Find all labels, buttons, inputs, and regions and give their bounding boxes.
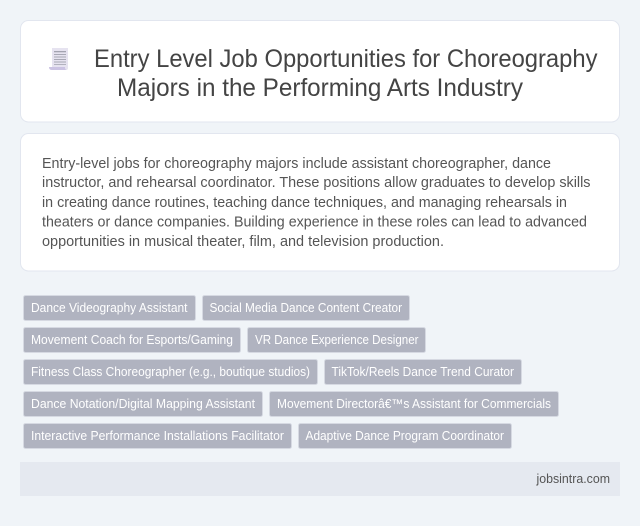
- description text: instructor, and rehearsal coordinator. These positions allow graduates to develop skills: [42, 174, 590, 191]
- panel: job tags: [24, 296, 558, 448]
- panel: title card: [20, 20, 620, 122]
- tag: VR Dance Experience Designer: [255, 333, 418, 347]
- tag: [248, 328, 426, 352]
- tag: [324, 360, 522, 384]
- title: Majors in the Performing Arts Industry: [117, 74, 523, 102]
- tag: Dance Videography Assistant: [31, 301, 188, 315]
- description text: theaters or dance companies. Building experience in these roles can lead to advanced: [42, 214, 587, 230]
- tag: [24, 328, 240, 352]
- tag: [24, 424, 292, 448]
- tag: TikTok/Reels Dance Trend Curator: [332, 365, 514, 379]
- tag: [202, 296, 410, 320]
- tag: Social Media Dance Content Creator: [210, 301, 402, 315]
- description text: [42, 155, 590, 250]
- tag: Dance Notation/Digital Mapping Assistant: [31, 397, 256, 411]
- title: [94, 45, 598, 102]
- description text: Entry-level jobs for choreography majors include assistant choreographer, dance: [42, 155, 551, 172]
- tag: Adaptive Dance Program Coordinator: [306, 429, 504, 443]
- icon: scroll document: [49, 48, 68, 70]
- tag: Movement Coach for Esports/Gaming: [31, 333, 233, 347]
- tag: Fitness Class Choreographer (e.g., boutique studios): [31, 365, 310, 379]
- tag: [24, 296, 196, 320]
- panel: footer: [20, 462, 620, 496]
- title: Entry Level Job Opportunities for Choreography: [94, 45, 598, 73]
- tag: [24, 392, 262, 416]
- tag: [24, 360, 318, 384]
- tag: [270, 392, 558, 416]
- tag: Movement Directorâ€™s Assistant for Commercials: [277, 397, 551, 411]
- footer source text: jobsintra.com: [536, 472, 610, 486]
- description text: opportunities in musical theater, film, and television production.: [42, 233, 444, 250]
- description text: in creating dance routines, teaching dance techniques, and managing rehearsals in: [42, 194, 567, 211]
- tag: [298, 424, 512, 448]
- panel: description card: [20, 134, 620, 271]
- tag: Interactive Performance Installations Facilitator: [31, 429, 284, 443]
